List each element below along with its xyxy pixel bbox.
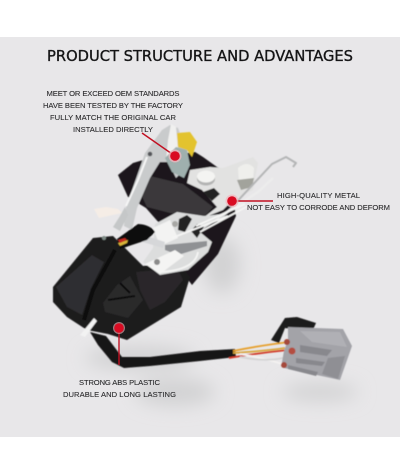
callout: OEM standards bbox=[43, 89, 183, 162]
bolt cluster bbox=[165, 147, 190, 178]
callout text: OEM standards: INSTALLED DIRECTLY bbox=[73, 125, 153, 134]
white clip bbox=[94, 207, 122, 218]
yellow plastic clip bbox=[177, 132, 197, 157]
pointer: metal bbox=[226, 194, 273, 208]
linkage bar bbox=[165, 241, 207, 255]
cable tie bbox=[80, 318, 97, 337]
lower latch assembly bbox=[143, 212, 222, 275]
soft shadows bbox=[85, 237, 358, 406]
pointer: OEM standards bbox=[142, 133, 182, 162]
upper black actuator housing bbox=[118, 152, 236, 285]
callout text: ABS plastic: DURABLE AND LONG LASTING bbox=[63, 390, 176, 399]
callout: ABS plastic bbox=[63, 322, 176, 399]
rivet bbox=[238, 164, 254, 184]
latch plate bbox=[187, 157, 258, 218]
callout text: metal: HIGH-QUALITY METAL bbox=[277, 191, 360, 200]
grey electrical connector bbox=[271, 317, 352, 380]
callout text: ABS plastic bbox=[63, 378, 176, 399]
pointer: ABS plastic bbox=[113, 322, 125, 365]
silver mounting plate bbox=[124, 125, 186, 230]
callout text: metal: NOT EASY TO CORRODE AND DEFORM bbox=[247, 203, 390, 212]
door lock product photo bbox=[53, 124, 352, 380]
callout text: ABS plastic: STRONG ABS PLASTIC bbox=[79, 378, 161, 387]
title: PRODUCT STRUCTURE AND ADVANTAGES bbox=[47, 47, 353, 65]
lower black actuator housing bbox=[53, 236, 190, 340]
callout text: OEM standards: HAVE BEEN TESTED BY THE FACTORY bbox=[43, 101, 183, 110]
bent rod bbox=[218, 157, 296, 222]
callout text: OEM standards bbox=[43, 89, 183, 134]
actuator arm bbox=[136, 233, 165, 248]
callout: metal bbox=[226, 191, 390, 212]
pivot lever bbox=[117, 224, 155, 249]
coloured wires bbox=[229, 341, 298, 365]
callout text: metal bbox=[247, 191, 390, 212]
callout text: OEM standards: FULLY MATCH THE ORIGINAL CAR bbox=[50, 113, 177, 122]
callout text: OEM standards: MEET OR EXCEED OEM STANDARDS bbox=[46, 89, 180, 98]
black cable bbox=[90, 332, 236, 368]
